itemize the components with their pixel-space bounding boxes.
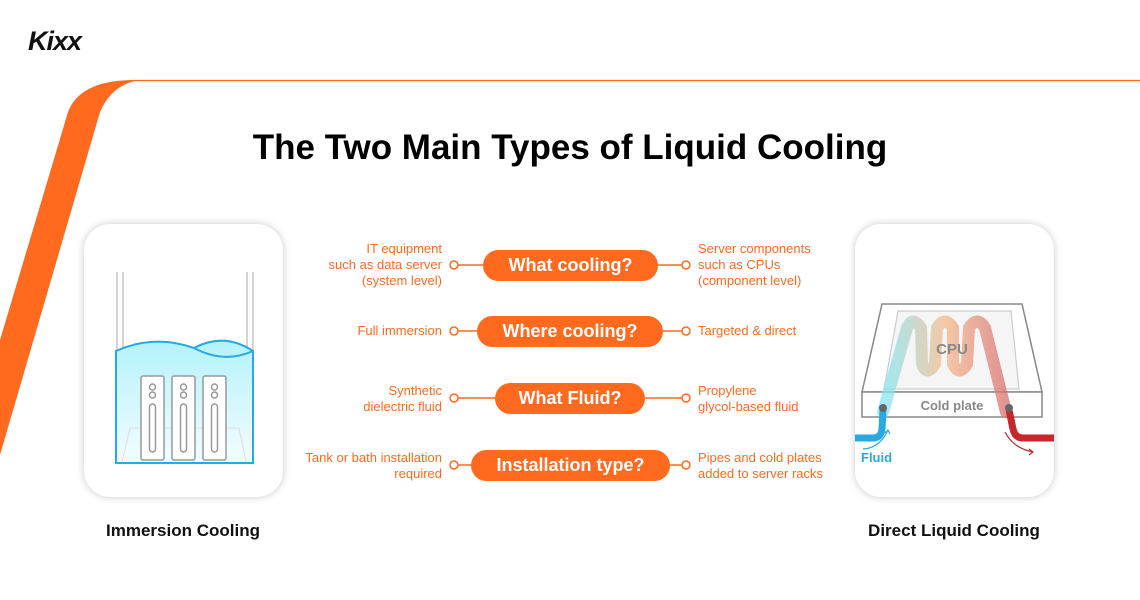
text: where right: Targeted & direct [698,323,796,338]
text: install right: Pipes and cold plates [698,450,822,465]
text: install right: added to server racks [698,466,823,481]
panel: direct liquid cooling: Cold plate [921,398,983,413]
text: install right [698,450,823,481]
pill: what cooling: What cooling? [508,255,632,275]
text: install left: required [394,466,442,481]
text: what cooling left [328,241,442,288]
text: what cooling right: Server components [698,241,811,256]
pill: installation type: Installation type? [496,455,645,475]
pill: what fluid: What Fluid? [518,388,621,408]
text: fluid left: dielectric fluid [363,399,442,414]
panel: direct liquid cooling: Fluid [861,450,892,465]
text: fluid left [363,383,442,414]
text: install left: Tank or bath installation [305,450,442,465]
panel: direct liquid cooling [855,224,1054,497]
text: what cooling right [698,241,811,288]
panel: immersion cooling [84,224,283,497]
text: fluid right: Propylene [698,383,757,398]
pill: where cooling [477,316,663,347]
text: install left [305,450,442,481]
text: what cooling left: (system level) [362,273,442,288]
title: The Two Main Types of Liquid Cooling [253,128,887,167]
panel: direct liquid cooling: CPU [936,341,968,358]
pill: installation type [471,450,670,481]
text: where left: Full immersion [357,323,442,338]
text: what cooling right: (component level) [698,273,801,288]
pill: what cooling [483,250,658,281]
label: immersion cooling: Immersion Cooling [106,521,260,540]
text: what cooling left: IT equipment [366,241,442,256]
text: fluid left: Synthetic [389,383,442,398]
text: what cooling left: such as data server [329,257,442,272]
label: direct liquid cooling: Direct Liquid Cooling [868,521,1040,540]
pill: where cooling: Where cooling? [502,321,638,341]
text: fluid right: glycol-based fluid [698,399,798,414]
logo: Kixx [28,26,81,56]
pill: what fluid [495,383,645,414]
text: what cooling right: such as CPUs [698,257,780,272]
text: fluid right [698,383,798,414]
